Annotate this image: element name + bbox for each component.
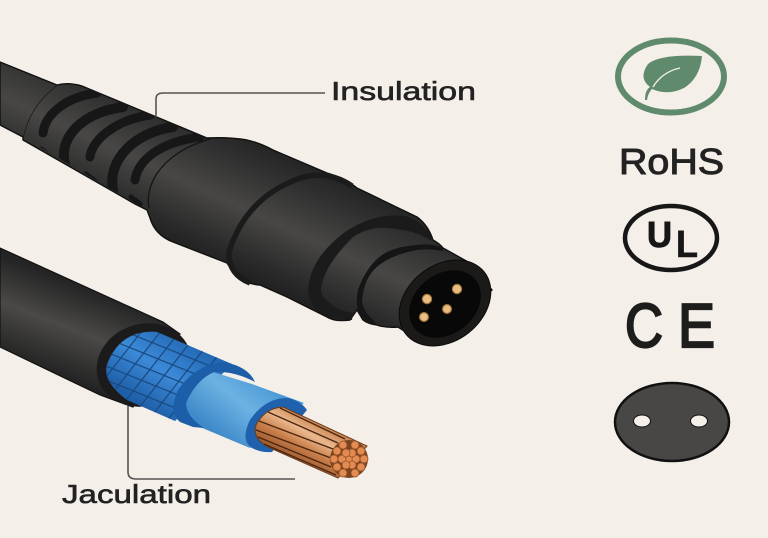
collar ring (308, 215, 433, 320)
jacket end rim (86, 311, 202, 419)
CE mark (625, 292, 715, 361)
copper strand ends (330, 441, 368, 477)
CE mark: E (678, 292, 715, 361)
leader line: jaculation (128, 406, 295, 479)
connector face (382, 242, 508, 364)
icon: two-pin socket (615, 383, 729, 461)
leader line: insulation (156, 93, 325, 117)
insulation end ring (245, 398, 307, 452)
copper conductor (255, 407, 368, 478)
connector silhouette (0, 62, 492, 343)
icon: UL mark: U (647, 214, 672, 255)
tip ring (357, 244, 443, 325)
CE mark: C (625, 292, 663, 361)
outer jacket (0, 248, 180, 407)
braided shield (106, 332, 232, 421)
body ring (229, 175, 352, 283)
label: insulation: Insulation (331, 76, 476, 106)
pins (420, 284, 462, 321)
connector cable assembly (0, 62, 508, 364)
shield end ring (173, 362, 255, 428)
label: jaculation: Jaculation (62, 479, 211, 509)
icon: UL mark: L (676, 224, 698, 266)
body shoulder (148, 139, 210, 208)
icon: eco leaf (618, 40, 724, 112)
icon: UL mark (625, 206, 717, 270)
RoHS label: RoHS (619, 141, 724, 182)
ribbed strain relief (23, 85, 200, 204)
inner insulation (183, 372, 304, 448)
stripped cable assembly (0, 248, 368, 478)
